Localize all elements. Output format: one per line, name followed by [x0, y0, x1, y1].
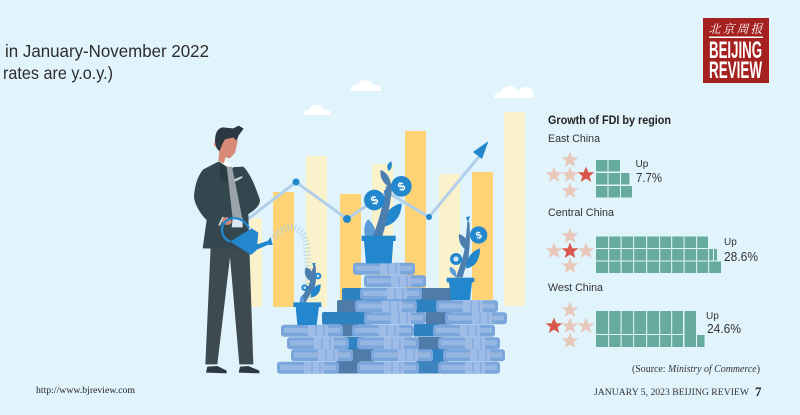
small plant in pot [293, 263, 321, 325]
coin stacks: dark rear blocks [322, 288, 452, 374]
logo: Beijing Review [703, 18, 769, 84]
West China value: Up [706, 311, 719, 322]
logo: Beijing Review: 北京周报 [708, 22, 763, 36]
West China block bar [596, 311, 704, 347]
right plant with dollar coin: $ [475, 230, 484, 242]
West China block dividers [608, 311, 672, 347]
clouds [303, 80, 534, 115]
Central China value: 28.6% [724, 249, 758, 264]
coin stack middle [352, 263, 433, 374]
heading text [3, 41, 209, 83]
Central China value [724, 237, 758, 264]
middle plant with dollar coins: $ [368, 192, 381, 208]
bar chart background [250, 112, 525, 307]
trend line with arrow [248, 141, 488, 223]
middle plant with dollar coins: $ [395, 179, 408, 194]
East China value: 7.7% [636, 170, 662, 185]
Central China block bar [596, 236, 721, 273]
East China value [636, 159, 662, 185]
footer url: http://www.bjreview.com [36, 386, 136, 396]
water spray [274, 227, 312, 300]
East China value: Up [636, 159, 649, 170]
West China value [706, 311, 741, 336]
right plant with dollar coin [447, 216, 487, 300]
panel: growth of FDI by region [546, 115, 758, 348]
East China star map [546, 152, 594, 198]
man: legs and shoes [205, 247, 259, 373]
Central China value: Up [724, 237, 737, 248]
coin stack right [433, 300, 507, 374]
East China label: East China [548, 133, 601, 145]
coin stack left [277, 325, 353, 374]
East China block bar [596, 160, 632, 198]
source note: (Source: Ministry of Commerce) [632, 364, 760, 375]
Central China block dividers [608, 236, 709, 273]
West China label: West China [548, 282, 604, 294]
heading text: rates are y.o.y.) [3, 63, 113, 83]
Central China star map [546, 228, 594, 273]
businessman watering plants [194, 126, 273, 373]
man: torso, head and watering can [194, 126, 273, 255]
panel heading: Growth of FDI by region [548, 115, 671, 127]
page number: 7 [755, 384, 762, 399]
West China star map [546, 302, 594, 348]
middle plant with dollar coins [362, 161, 412, 263]
West China value: 24.6% [707, 321, 741, 336]
heading text: in January-November 2022 [5, 41, 209, 61]
Central China label: Central China [548, 207, 615, 219]
footer date and masthead: JANUARY 5, 2023 BEIJING REVIEW [594, 388, 749, 398]
